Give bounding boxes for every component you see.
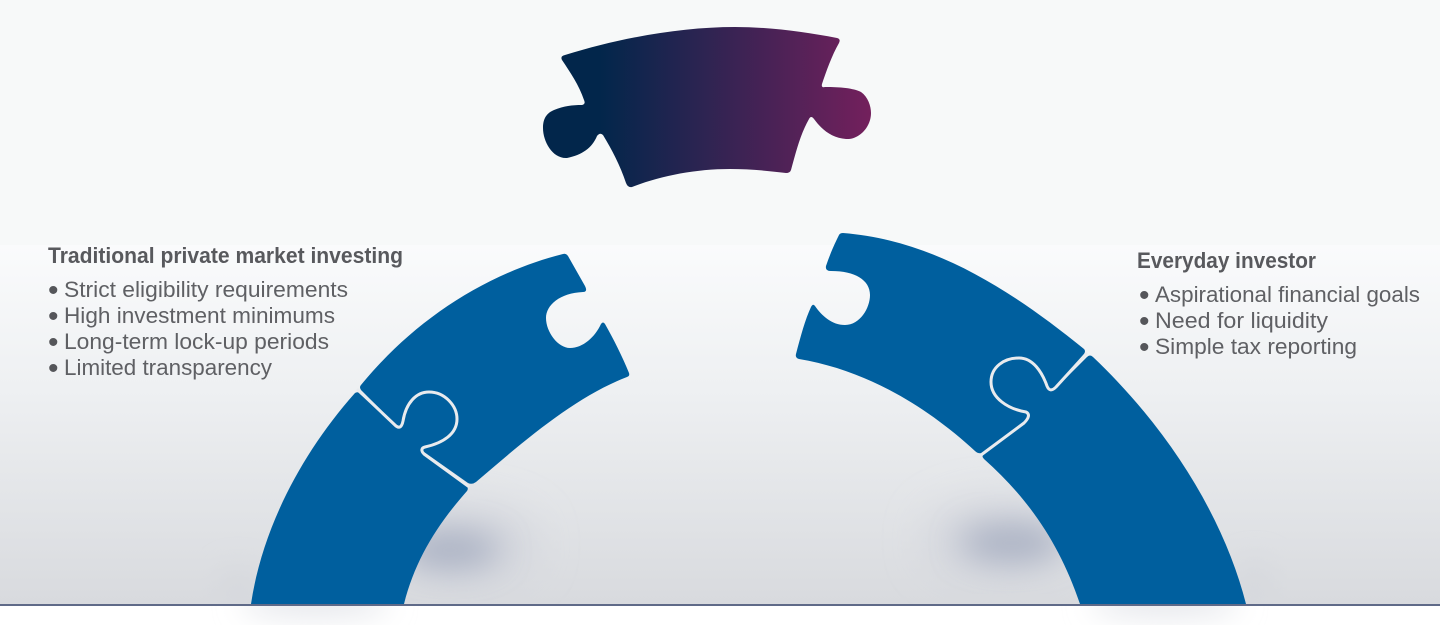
shadows beneath the arches bbox=[220, 506, 1271, 616]
bullet list: Strict eligibility requirements bbox=[64, 277, 348, 302]
left arch: upper piece bbox=[360, 254, 629, 484]
bullet list: • bbox=[1139, 305, 1150, 338]
bullet list bbox=[48, 274, 348, 385]
right arch: lower piece bbox=[982, 356, 1246, 604]
right arch: seam bbox=[981, 354, 1086, 455]
right arch bbox=[796, 233, 1246, 604]
bullet list: • bbox=[48, 326, 59, 359]
bullet list: Aspirational financial goals bbox=[1155, 282, 1420, 307]
bullet list: Limited transparency bbox=[64, 355, 272, 380]
heading: Everyday investor bbox=[1137, 248, 1316, 273]
bullet list: Simple tax reporting bbox=[1155, 334, 1357, 359]
bullet list: High investment minimums bbox=[64, 303, 335, 328]
bullet list: • bbox=[1139, 331, 1150, 364]
text block: traditional private market investing bbox=[48, 243, 403, 385]
heading: Traditional private market investing bbox=[48, 243, 403, 268]
left arch bbox=[251, 254, 629, 604]
left arch: seam bbox=[358, 390, 468, 486]
bullet list: • bbox=[1139, 279, 1150, 312]
right arch: upper piece bbox=[796, 233, 1085, 453]
bullet list: • bbox=[48, 300, 59, 333]
bullet list: • bbox=[48, 274, 59, 307]
bullet list bbox=[1139, 279, 1420, 364]
bullet list: • bbox=[48, 352, 59, 385]
left arch: lower piece bbox=[251, 392, 468, 604]
text block: everyday investor bbox=[1137, 248, 1420, 364]
puzzle piece: floating connector bbox=[543, 27, 871, 187]
bullet list: Need for liquidity bbox=[1155, 308, 1328, 333]
baseline rule bbox=[0, 604, 1440, 606]
bullet list: Long-term lock-up periods bbox=[64, 329, 329, 354]
